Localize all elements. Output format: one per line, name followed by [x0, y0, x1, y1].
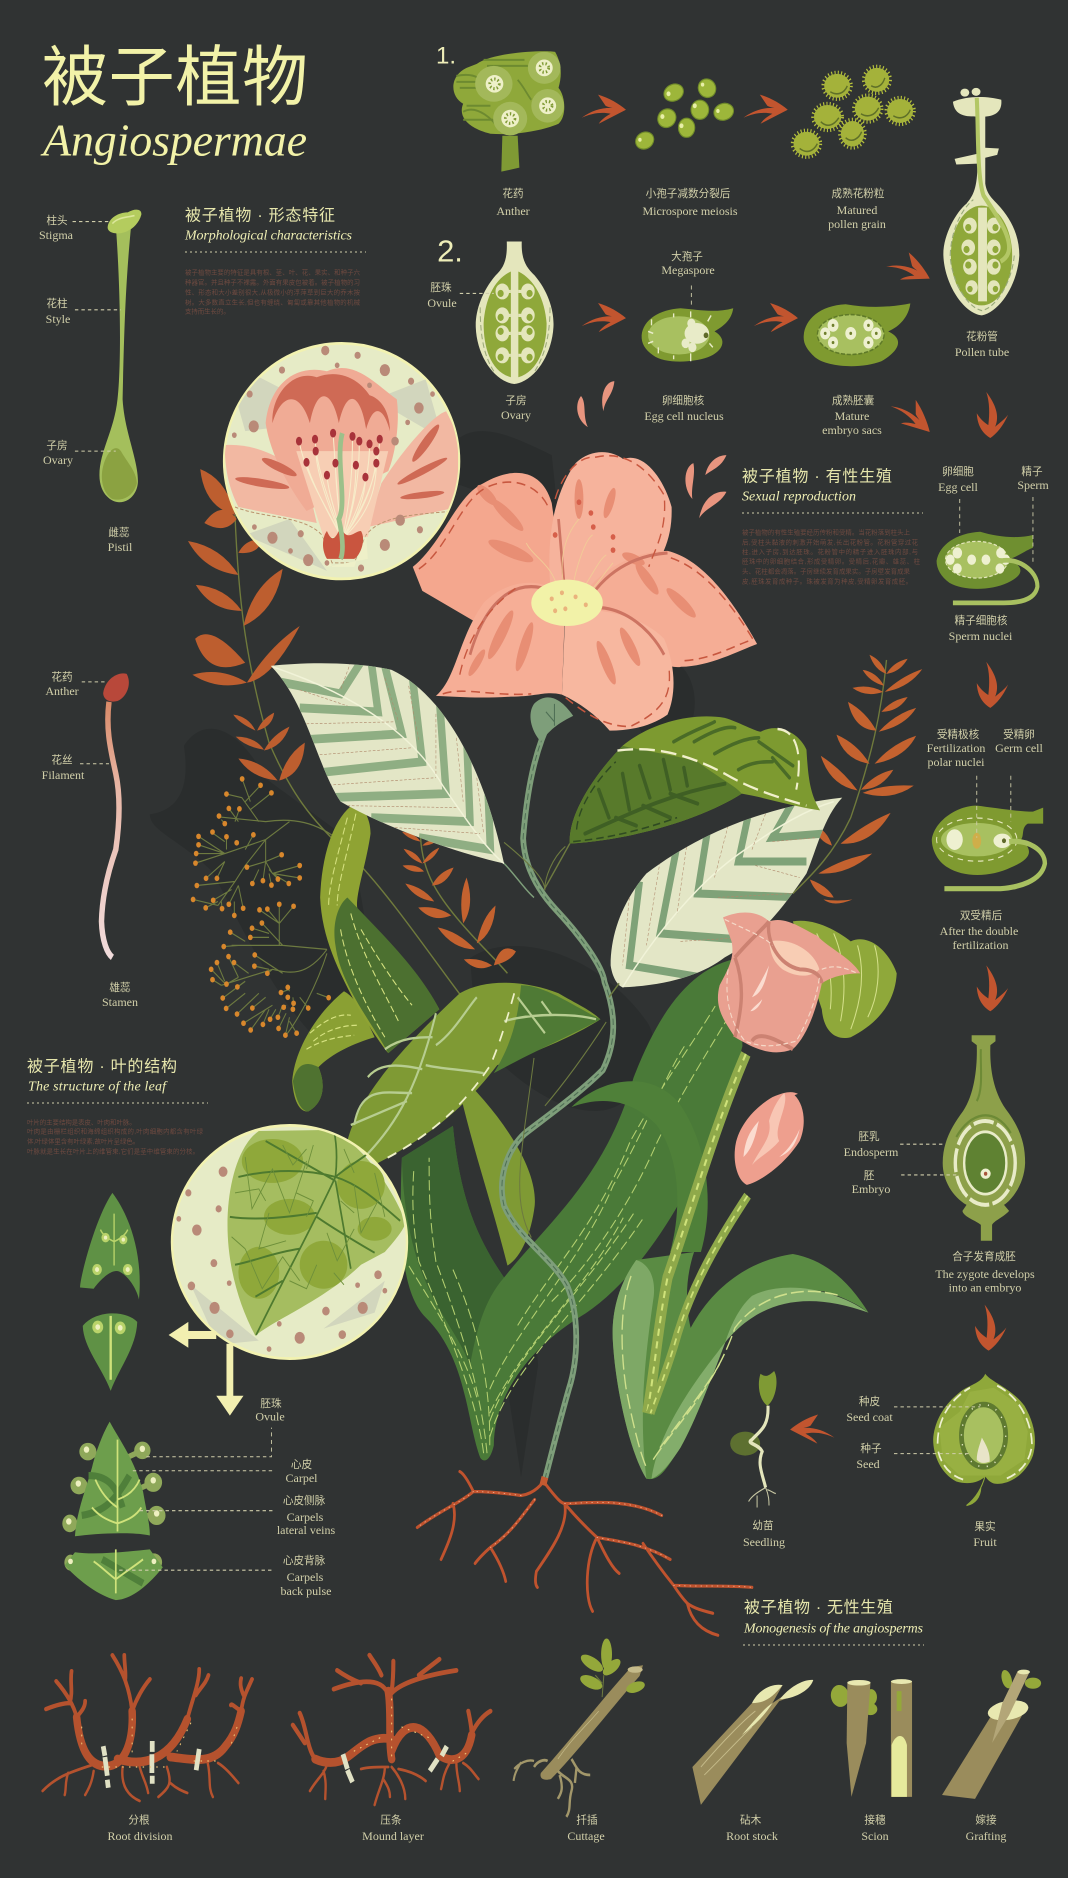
- section: sexual reproduction: [742, 468, 923, 586]
- labels: embryo sac sequence: Megaspore: [661, 263, 715, 277]
- labels: pollen sequence: 花药: [502, 187, 524, 200]
- labels: stamen: Stamen: [102, 995, 138, 1009]
- green central leaf: [347, 983, 600, 1163]
- labels: embryo sac sequence: embryo sacs: [822, 423, 882, 437]
- labels: pollen sequence: [496, 187, 1009, 359]
- labels: pollen sequence: 小孢子减数分裂后: [646, 187, 731, 200]
- section: structure of the leaf: 叶片的主要结构是表皮、叶肉和叶脉。: [27, 1118, 136, 1126]
- labels: fertilization column: 胚乳: [858, 1130, 880, 1143]
- labels: asexual methods: Scion: [861, 1829, 889, 1843]
- pollen tube on ovary: [943, 88, 1019, 315]
- zygote embryo diagram: [943, 1035, 1025, 1241]
- step 1: pollen grains: [794, 68, 913, 156]
- labels: asexual methods: 接穗: [864, 1814, 886, 1826]
- cuttage roots extension: [514, 1760, 534, 1781]
- labels: pollen sequence: Microspore meiosis: [642, 204, 738, 218]
- labels: asexual methods: Root stock: [726, 1829, 778, 1843]
- big dark leaf: [401, 958, 742, 1460]
- labels: carpel: [255, 1397, 335, 1598]
- labels: fertilization column: 双受精后: [960, 909, 1003, 922]
- labels: fertilization column: Sperm: [1017, 478, 1049, 492]
- labels: embryo sac sequence: 子房: [505, 394, 527, 407]
- labels: carpel: 胚珠: [260, 1397, 282, 1410]
- asexual: root division: [43, 1655, 252, 1801]
- section: sexual reproduction: 被子植物 · 有性生殖: [742, 468, 892, 486]
- labels: carpel: Ovule: [255, 1410, 285, 1424]
- step 2: ovary with ovules: [476, 242, 554, 384]
- step 1: anther: [453, 51, 564, 172]
- curling leaf centre: [320, 804, 439, 1053]
- labels: pollen sequence: Matured: [837, 203, 877, 217]
- asexual: root stock: [692, 1680, 813, 1805]
- pistil: [99, 210, 141, 502]
- step 1: microspores: [634, 77, 735, 151]
- section: morphological characteristics: 支持而生长的。: [185, 306, 230, 316]
- magnified leaf circle: [172, 1125, 407, 1359]
- labels: carpel: Carpel: [286, 1471, 318, 1485]
- seedling: [730, 1371, 777, 1507]
- round back leaf of tulip: [793, 921, 897, 1038]
- labels: stamen: 花药: [51, 670, 73, 684]
- asexual: scion: [827, 1679, 912, 1797]
- carpel: [62, 1422, 166, 1600]
- striped leaf upper: [271, 662, 534, 897]
- petal drops left: [577, 381, 614, 427]
- petal: right: [368, 411, 458, 527]
- section: structure of the leaf: 体,叶绿体里含有叶绿素,故叶片呈绿色。: [27, 1136, 139, 1146]
- magnified flower circle: [224, 343, 459, 579]
- labels: pistil: Stigma: [39, 228, 74, 242]
- petal drops right: [685, 455, 726, 518]
- process arrows: [582, 95, 1008, 1444]
- section: structure of the leaf: The structure of the leaf: [28, 1080, 168, 1094]
- labels: asexual methods: Grafting: [966, 1829, 1006, 1843]
- title: Angiospermae: [40, 114, 307, 166]
- labels: pistil: Ovary: [43, 453, 73, 467]
- labels: asexual methods: 分根: [128, 1814, 150, 1826]
- step numbers: [436, 42, 463, 268]
- step numbers: 2.: [437, 234, 463, 268]
- labels: carpel: Carpels: [287, 1510, 324, 1524]
- labels: fertilization column: Fruit: [973, 1535, 997, 1549]
- section: sexual reproduction: 头、花柱都会凋落。子房继续发育成果实。子房壁发育成果: [742, 566, 911, 576]
- petal: back left: [413, 473, 565, 623]
- labels: pistil: 子房: [46, 439, 68, 452]
- enlargement arrows: [169, 1322, 244, 1416]
- labels: pistil: 雌蕊: [108, 526, 130, 539]
- labels: embryo sac sequence: 胚珠: [430, 281, 452, 294]
- labels: asexual methods: Cuttage: [567, 1829, 605, 1843]
- section: morphological characteristics: 被子植物主要的特征是具有根、茎、叶、花、果实、和种子六: [185, 268, 361, 276]
- labels: fertilization column: into an embryo: [949, 1280, 1021, 1294]
- section: sexual reproduction: 胚珠中的卵细胞结合,形成受精卵。受精后,花瓣、雄蕊、柱: [742, 556, 921, 566]
- labels: embryo sac sequence: 大孢子: [671, 250, 703, 263]
- striped leaf lower: [544, 798, 842, 997]
- curling leaf left: [292, 991, 375, 1111]
- labels: fertilization column: 受精极核: [937, 728, 980, 741]
- dashed leader lines: [73, 222, 1033, 1570]
- labels: fertilization column: 卵细胞: [942, 465, 974, 478]
- stems of tulips: [647, 1054, 748, 1413]
- labels: fertilization column: Seed coat: [846, 1410, 893, 1424]
- labels: fertilization column: After the double: [940, 924, 1018, 938]
- labels: fertilization column: Egg cell: [938, 480, 978, 494]
- labels: pollen sequence: 花粉管: [966, 330, 998, 343]
- labels: fertilization column: fertilization: [953, 938, 1008, 952]
- labels: fertilization column: Endosperm: [844, 1145, 899, 1159]
- labels: fertilization column: 精子细胞核: [955, 614, 1008, 627]
- section: monogenesis: [743, 1598, 924, 1645]
- labels: asexual methods: 压条: [380, 1814, 402, 1826]
- labels: pollen sequence: Anther: [496, 204, 530, 218]
- labels: fertilization column: 精子: [1021, 465, 1043, 478]
- petal: top: [266, 368, 398, 511]
- labels: fertilization column: 种子: [860, 1442, 882, 1455]
- section: morphological characteristics: Morphological characteristics: [184, 228, 353, 244]
- plant roots: [417, 1472, 752, 1635]
- right lower leaf: [613, 1252, 868, 1479]
- sperm nuclei diagram: [937, 532, 1037, 603]
- labels: asexual methods: 扦插: [576, 1814, 598, 1826]
- labels: carpel: back pulse: [281, 1584, 331, 1598]
- labels: fertilization column: Germ cell: [995, 741, 1043, 755]
- labels: stamen: 雄蕊: [109, 981, 131, 994]
- labels: carpel: Carpels: [287, 1570, 324, 1584]
- labels: stamen: Filament: [42, 768, 85, 782]
- labels: pollen sequence: 成熟花粉粒: [832, 187, 885, 200]
- section: structure of the leaf: [27, 1058, 208, 1156]
- tulip: [718, 913, 860, 1052]
- labels: fertilization column: 果实: [974, 1520, 996, 1533]
- labels: asexual methods: [107, 1814, 1006, 1843]
- flower calyx: [530, 697, 573, 742]
- thin side stems: [504, 842, 606, 1238]
- section: sexual reproduction: 被子植物的有性生殖要经历传粉和受精。当花粉落到柱头上: [742, 528, 911, 536]
- labels: stamen: [42, 670, 138, 1009]
- section: morphological characteristics: [184, 206, 366, 316]
- petal: bottom left: [436, 583, 565, 698]
- labels: embryo sac sequence: 卵细胞核: [662, 394, 705, 407]
- tulip bud: [735, 1092, 804, 1185]
- labels: fertilization column: The zygote develops: [935, 1267, 1035, 1281]
- labels: asexual methods: 砧木: [740, 1814, 762, 1826]
- light tall leaf: [455, 1070, 535, 1266]
- title: [40, 40, 308, 166]
- leaf structure: lower split piece: [83, 1313, 137, 1391]
- section: monogenesis: 被子植物 · 无性生殖: [744, 1598, 893, 1616]
- labels: pistil: [39, 214, 133, 554]
- labels: fertilization column: 幼苗: [752, 1519, 774, 1532]
- dark green heart leaf: [570, 716, 820, 844]
- labels: pistil: 柱头: [46, 214, 68, 227]
- section: structure of the leaf: 叶肉是由栅栏组织和海绵组织构成的,叶肉细胞内都含有叶绿: [27, 1126, 204, 1136]
- labels: embryo sac sequence: Ovary: [501, 408, 531, 422]
- petal: top middle: [549, 452, 672, 615]
- section: structure of the leaf: 叶脉就是生长在叶片上的维管束,它们是茎中维管束的分枝。: [27, 1146, 199, 1156]
- megaspore egg cell: [642, 308, 733, 362]
- section: morphological characteristics: 被子植物 · 形态特征: [185, 206, 335, 224]
- labels: fertilization column: Sperm nuclei: [949, 629, 1013, 643]
- flower centre: [531, 580, 603, 626]
- asexual: mound layer: [293, 1655, 490, 1805]
- labels: carpel: 心皮背脉: [283, 1554, 326, 1567]
- section: sexual reproduction: 皮,胚珠发育成种子。珠被发育为种皮,受精卵发育成胚。: [742, 576, 912, 586]
- asexual: cuttage: [534, 1638, 646, 1817]
- labels: stamen: Anther: [45, 684, 79, 698]
- leaf blade: [228, 1130, 405, 1336]
- labels: carpel: 心皮: [291, 1458, 312, 1471]
- step numbers: 1.: [436, 42, 456, 70]
- main lily flower: [413, 452, 757, 731]
- fern: right: [793, 655, 922, 903]
- berry branches: [191, 776, 341, 1038]
- labels: pistil: 花柱: [46, 297, 68, 310]
- title: 被子植物: [42, 40, 308, 114]
- fern: upper left: [188, 469, 460, 994]
- asexual: grafting: [942, 1668, 1041, 1799]
- labels: stamen: 花丝: [51, 754, 73, 766]
- labels: pistil: Pistil: [108, 540, 133, 554]
- labels: fertilization column: 种皮: [859, 1395, 880, 1408]
- labels: embryo sac sequence: [427, 250, 882, 437]
- petal: top markings: [272, 374, 390, 431]
- labels: pollen sequence: Pollen tube: [955, 345, 1009, 359]
- stamen: [101, 673, 129, 957]
- main winding stem: [502, 719, 613, 1485]
- section: structure of the leaf: 被子植物 · 叶的结构: [27, 1058, 177, 1076]
- labels: carpel: 心皮侧脉: [283, 1494, 326, 1507]
- labels: fertilization column: Seedling: [743, 1535, 785, 1549]
- labels: asexual methods: Root division: [107, 1829, 173, 1843]
- labels: fertilization column: 胚: [864, 1170, 875, 1182]
- labels: embryo sac sequence: Egg cell nucleus: [644, 409, 724, 423]
- labels: pistil: Style: [46, 312, 70, 326]
- fern: centre: [402, 832, 516, 973]
- labels: fertilization column: Seed: [856, 1457, 880, 1471]
- labels: pollen sequence: pollen grain: [828, 217, 886, 231]
- section: morphological characteristics: 性、形态和大小差别很大,从极微小的浮萍草到巨大的乔木按: [185, 288, 361, 296]
- mature embryo sac: [804, 303, 910, 366]
- petal: bottom right: [562, 610, 674, 731]
- section: sexual reproduction: 后,受柱头黏液的刺激开始萌发,长出花粉管。花粉管穿过花: [742, 538, 919, 546]
- labels: asexual methods: Mound layer: [362, 1829, 424, 1843]
- labels: embryo sac sequence: 成熟胚囊: [832, 394, 875, 407]
- section: morphological characteristics: 树。大多数直立生长,但也有缠绕、匍匐或靠其他植物的机械: [185, 298, 361, 306]
- petal: throat: [296, 451, 388, 537]
- after double fertilization diagram: [932, 806, 1045, 889]
- labels: asexual methods: 嫁接: [975, 1814, 997, 1826]
- labels: fertilization column: Fertilization: [927, 741, 985, 755]
- labels: carpel: lateral veins: [277, 1523, 335, 1537]
- section: morphological characteristics: 种器官。并且种子不裸露。外面有果皮包被着。被子植物的习: [185, 278, 360, 286]
- fruit: [933, 1374, 1035, 1505]
- labels: fertilization column: 合子发育成胚: [952, 1250, 1016, 1263]
- labels: fertilization column: 受精卵: [1003, 728, 1035, 741]
- labels: fertilization column: polar nuclei: [928, 755, 985, 769]
- section: sexual reproduction: Sexual reproduction: [742, 490, 856, 504]
- petal: left: [225, 445, 317, 523]
- section: monogenesis: Monogenesis of the angiosperms: [743, 1622, 924, 1636]
- arching leaf right: [571, 1081, 708, 1252]
- petal: right: [586, 551, 757, 667]
- labels: embryo sac sequence: Mature: [835, 409, 869, 423]
- labels: fertilization column: Embryo: [852, 1182, 890, 1196]
- plant shadow silhouettes: [150, 431, 695, 1477]
- section: sexual reproduction: 柱,进入子房,到达胚珠。花粉管中的精子进入胚珠内部,与: [742, 547, 918, 556]
- labels: embryo sac sequence: Ovule: [427, 296, 457, 310]
- labels: fertilization column: [743, 465, 1049, 1549]
- leaf structure: upper split piece: [80, 1193, 140, 1299]
